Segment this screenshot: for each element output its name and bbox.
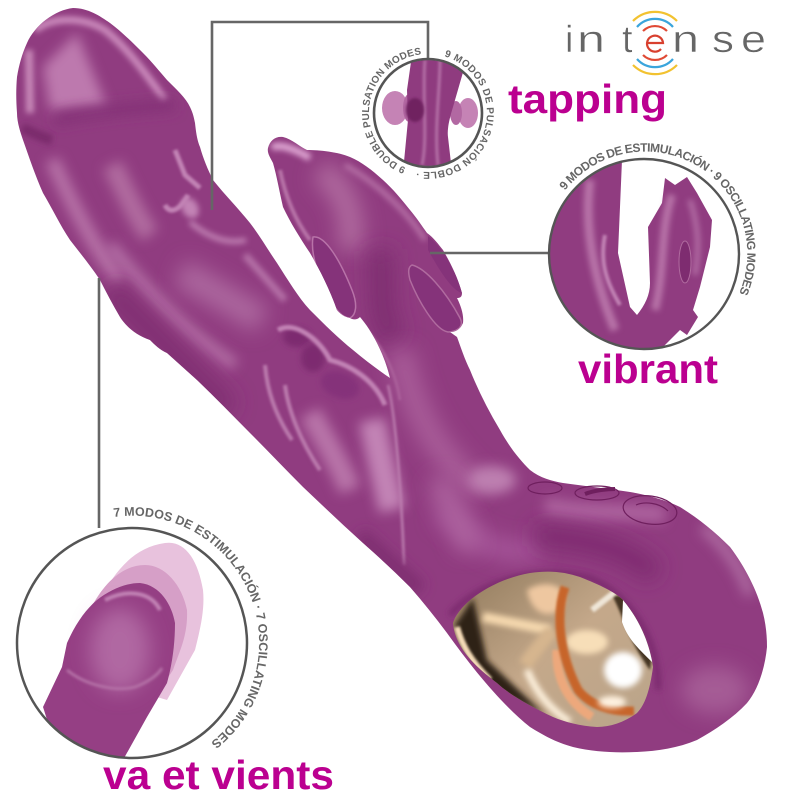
circle: oscillating detail: [17, 528, 247, 760]
buttons: [528, 482, 679, 528]
logo: rainbow rings: [633, 12, 677, 74]
ring text: tapping: [362, 48, 494, 179]
logo: intense: i: [565, 19, 573, 61]
connector: tapping line: [212, 22, 428, 210]
label: vibrant: vibrant: [578, 346, 718, 392]
circle: vibrant detail: [540, 159, 739, 360]
logo: intense: n: [577, 19, 605, 61]
label: va et vients: va et vients: [103, 752, 334, 798]
logo: intense: s: [712, 19, 734, 61]
logo: intense: t: [622, 19, 633, 61]
gold opening: [453, 572, 653, 727]
dolphin head: [272, 146, 310, 158]
connector: oscillating line: [98, 278, 100, 528]
shaft highlights: [52, 160, 120, 280]
side fin: [312, 237, 356, 318]
ring text: tapping: 9 DOUBLE PULSATION MODES: [362, 48, 421, 174]
logo: intense: n: [672, 19, 699, 61]
logo: intense: [565, 12, 766, 74]
ring text: oscillating: 7 MODOS DE ESTIMULACIÓN · 7 OSCILLATING MODES: [113, 507, 268, 748]
logo: intense: e: [741, 19, 766, 61]
back fins: [428, 236, 462, 293]
ring text: vibrant: 9 MODOS DE ESTIMULACIÓN · 9 OSCILLATING MODES: [560, 143, 756, 296]
ring text: tapping: 9 MODOS DE PULSACIÓN DOBLE ·: [416, 50, 494, 179]
label: tapping: tapping: [508, 76, 667, 122]
connector: vibrant line: [430, 252, 550, 254]
handle shading: [400, 350, 480, 490]
head shading: [43, 33, 107, 110]
veins: [165, 150, 200, 210]
circle: tapping detail: [374, 55, 482, 172]
